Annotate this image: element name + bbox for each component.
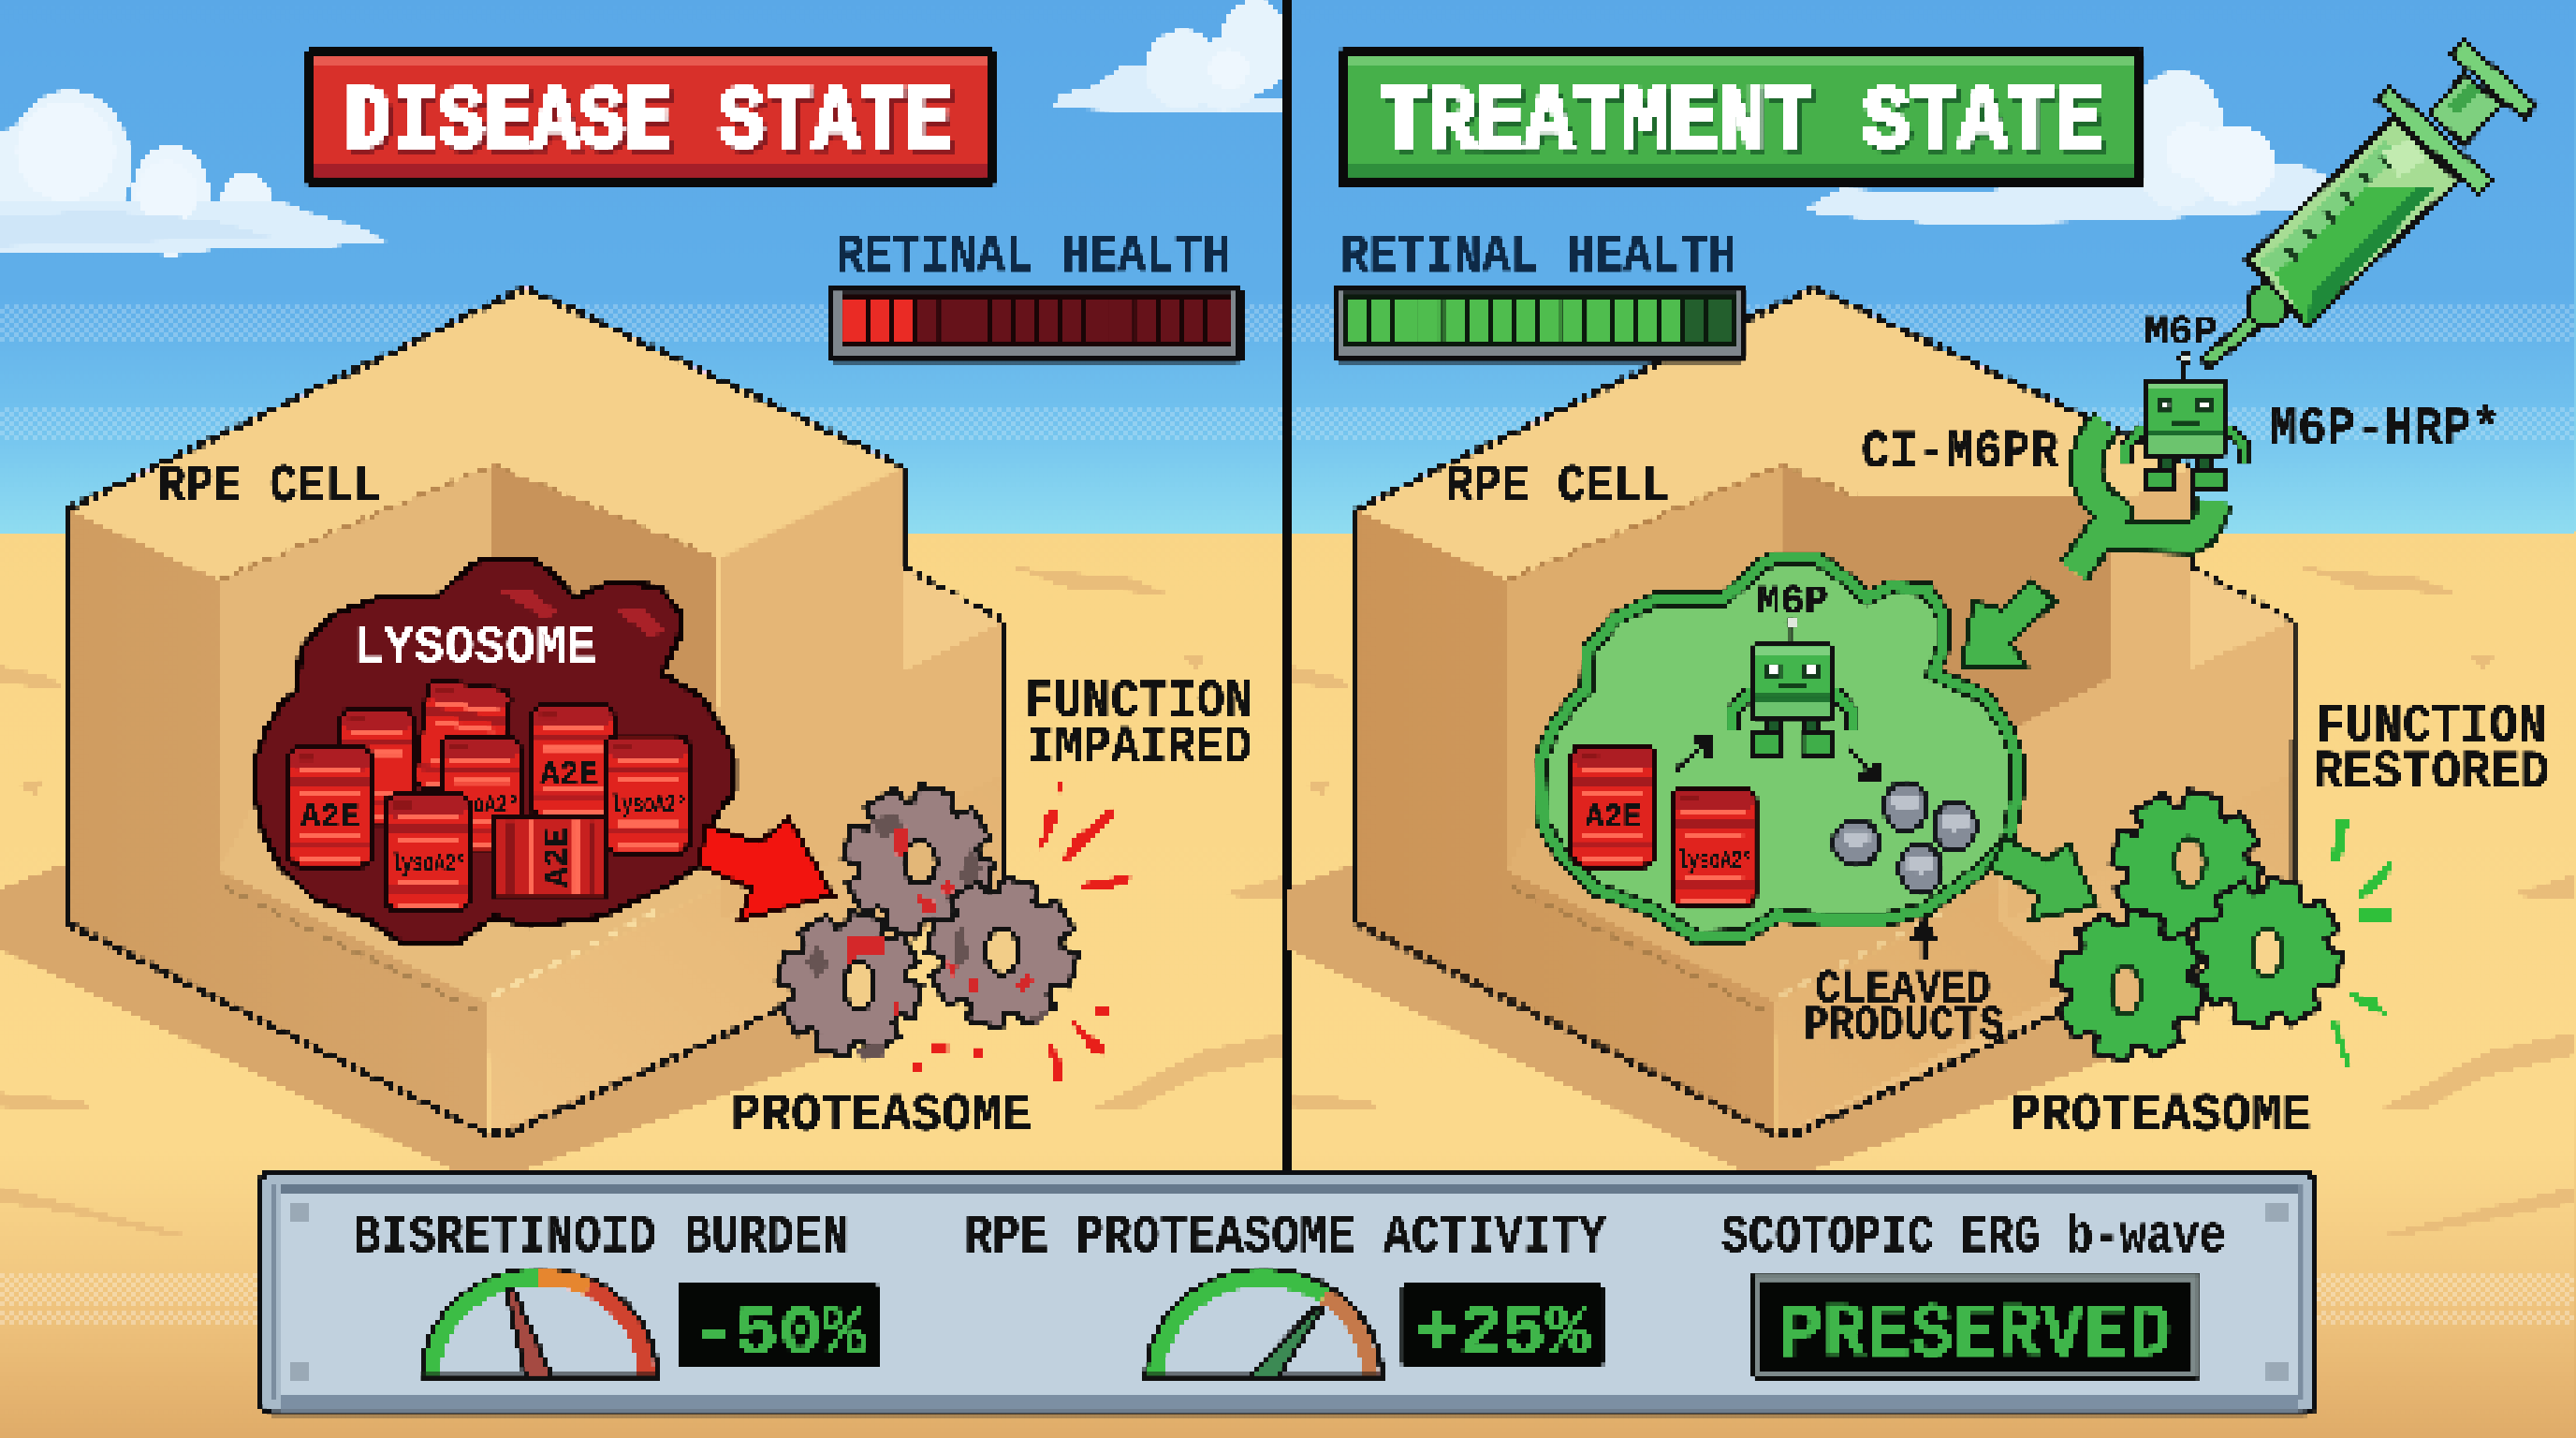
cloud: left panel large bbox=[0, 91, 386, 257]
barrel labels (treatment): lysoA2° bbox=[1677, 846, 1753, 874]
CI-M6PR receptor bbox=[2073, 424, 2215, 572]
cloud: left panel upper right bbox=[1053, 0, 1292, 111]
panel: disease state artwork bbox=[0, 287, 1132, 1169]
lysosome blob bbox=[255, 559, 735, 945]
back wall of cell cavity bbox=[1781, 465, 2110, 738]
barrel labels (disease): oA2° bbox=[473, 794, 520, 819]
lysosome blob, treated bbox=[1541, 559, 2017, 938]
label: function restored: FUNCTION bbox=[2317, 697, 2546, 757]
lysosome inner rim bbox=[1541, 559, 2017, 938]
label: retinal health (disease): RETINAL HEALTH bbox=[836, 227, 1231, 288]
label: function restored: RESTORED bbox=[2313, 743, 2550, 804]
sand dither bands bbox=[0, 1271, 2576, 1326]
barrel labels (disease): A2E bbox=[540, 756, 598, 794]
label: cleaved products: PRODUCTS bbox=[1804, 1000, 2004, 1053]
small reaction arrows bbox=[1676, 736, 1881, 784]
M6P-HRP robot bbox=[2126, 352, 2245, 490]
label: M6P-HRP: M6P-HRP* bbox=[2269, 400, 2500, 461]
readout: preserved: PRESERVED bbox=[1779, 1291, 2172, 1379]
remaining barrels bbox=[1569, 742, 1758, 910]
bisretinoid barrels cluster bbox=[285, 676, 692, 914]
arrow: to cleaved products label bbox=[1914, 920, 1934, 961]
sky dither bands bbox=[0, 305, 2576, 440]
label: function impaired: IMPAIRED bbox=[1027, 718, 1251, 779]
panel divider bbox=[1283, 0, 1293, 1173]
label: CI-M6PR: CI-M6PR bbox=[1862, 422, 2058, 483]
label: function restored bbox=[2313, 697, 2550, 804]
label: cleaved products: CLEAVED bbox=[1815, 963, 1991, 1017]
title banner: disease state bbox=[304, 48, 997, 187]
panel: treatment state artwork bbox=[1288, 46, 2532, 1169]
label: function impaired: FUNCTION bbox=[1025, 672, 1253, 733]
warmer tint on cell front faces bbox=[1355, 465, 2076, 1137]
RPE cell block bbox=[0, 287, 1005, 1169]
damaged proteasome gears bbox=[764, 771, 1091, 1070]
sand streaks bbox=[0, 566, 2576, 1236]
label: M6P: M6P bbox=[2144, 310, 2217, 357]
cloud: right panel behind banner bbox=[1806, 70, 2328, 225]
label: M6P inside lysosome: M6P bbox=[1756, 580, 1828, 626]
panel: metrics dashboard artwork bbox=[258, 1169, 2318, 1416]
dashboard frame bbox=[258, 1169, 2318, 1416]
gauge: proteasome activity bbox=[1144, 1269, 1385, 1376]
metric label: scotopic ERG b-wave: SCOTOPIC ERG b-wave bbox=[1721, 1208, 2226, 1269]
health bar: treatment, high bbox=[1332, 286, 1748, 363]
syringe bbox=[2202, 46, 2532, 368]
label: function impaired bbox=[1025, 672, 1253, 779]
barrel labels (treatment): A2E bbox=[1586, 800, 1641, 837]
back wall of cell cavity bbox=[493, 465, 718, 772]
barrel labels (disease): A2E bbox=[540, 828, 578, 888]
sand background bbox=[0, 533, 2576, 1438]
barrel labels (disease): lysoA2° bbox=[391, 850, 466, 878]
title banner: treatment state: TREATMENT STATE bbox=[1380, 73, 2103, 173]
label: cleaved products bbox=[1804, 963, 2004, 1053]
title banner: treatment state bbox=[1338, 48, 2145, 187]
robot enzyme inside lysosome bbox=[1733, 617, 1852, 755]
RPE cell block bbox=[1288, 287, 2293, 1169]
restored proteasome gears bbox=[2040, 776, 2356, 1075]
readout: -50%: -50% bbox=[692, 1295, 867, 1376]
barrel labels (disease) bbox=[300, 756, 687, 888]
cleaved product pieces bbox=[1834, 782, 1976, 894]
metric label: bisretinoid burden: BISRETINOID BURDEN bbox=[353, 1208, 849, 1269]
label: proteasome (treatment): PROTEASOME bbox=[2011, 1086, 2311, 1147]
barrel labels (treatment) bbox=[1586, 800, 1753, 874]
gauge: bisretinoid burden bbox=[419, 1269, 661, 1376]
barrel labels (disease): A2E bbox=[300, 800, 359, 837]
label: retinal health (treatment): RETINAL HEALTH bbox=[1340, 227, 1736, 288]
right face of cell bbox=[1998, 559, 2293, 821]
sky background bbox=[0, 0, 2576, 534]
title banner: disease state: DISEASE STATE bbox=[345, 73, 953, 173]
health bar: disease, low bbox=[828, 286, 1244, 363]
arrow: lysosome to proteasome bbox=[1989, 838, 2097, 920]
label: proteasome (disease): PROTEASOME bbox=[731, 1086, 1032, 1147]
barrel labels (disease): lysoA2° bbox=[611, 791, 687, 819]
readout: +25%: +25% bbox=[1414, 1295, 1591, 1376]
label: RPE cell (disease): RPE CELL bbox=[157, 457, 381, 518]
label: RPE cell (treatment): RPE CELL bbox=[1445, 457, 1669, 518]
damage sparks bbox=[914, 784, 1132, 1082]
arrow: lysosome to proteasome bbox=[698, 818, 833, 920]
restored sparks bbox=[2330, 820, 2392, 1068]
big arrow into lysosome bbox=[1962, 580, 2056, 668]
label: lysosome: LYSOSOME bbox=[353, 618, 596, 678]
metric label: RPE proteasome activity: RPE PROTEASOME ACTIVITY bbox=[964, 1208, 1607, 1269]
